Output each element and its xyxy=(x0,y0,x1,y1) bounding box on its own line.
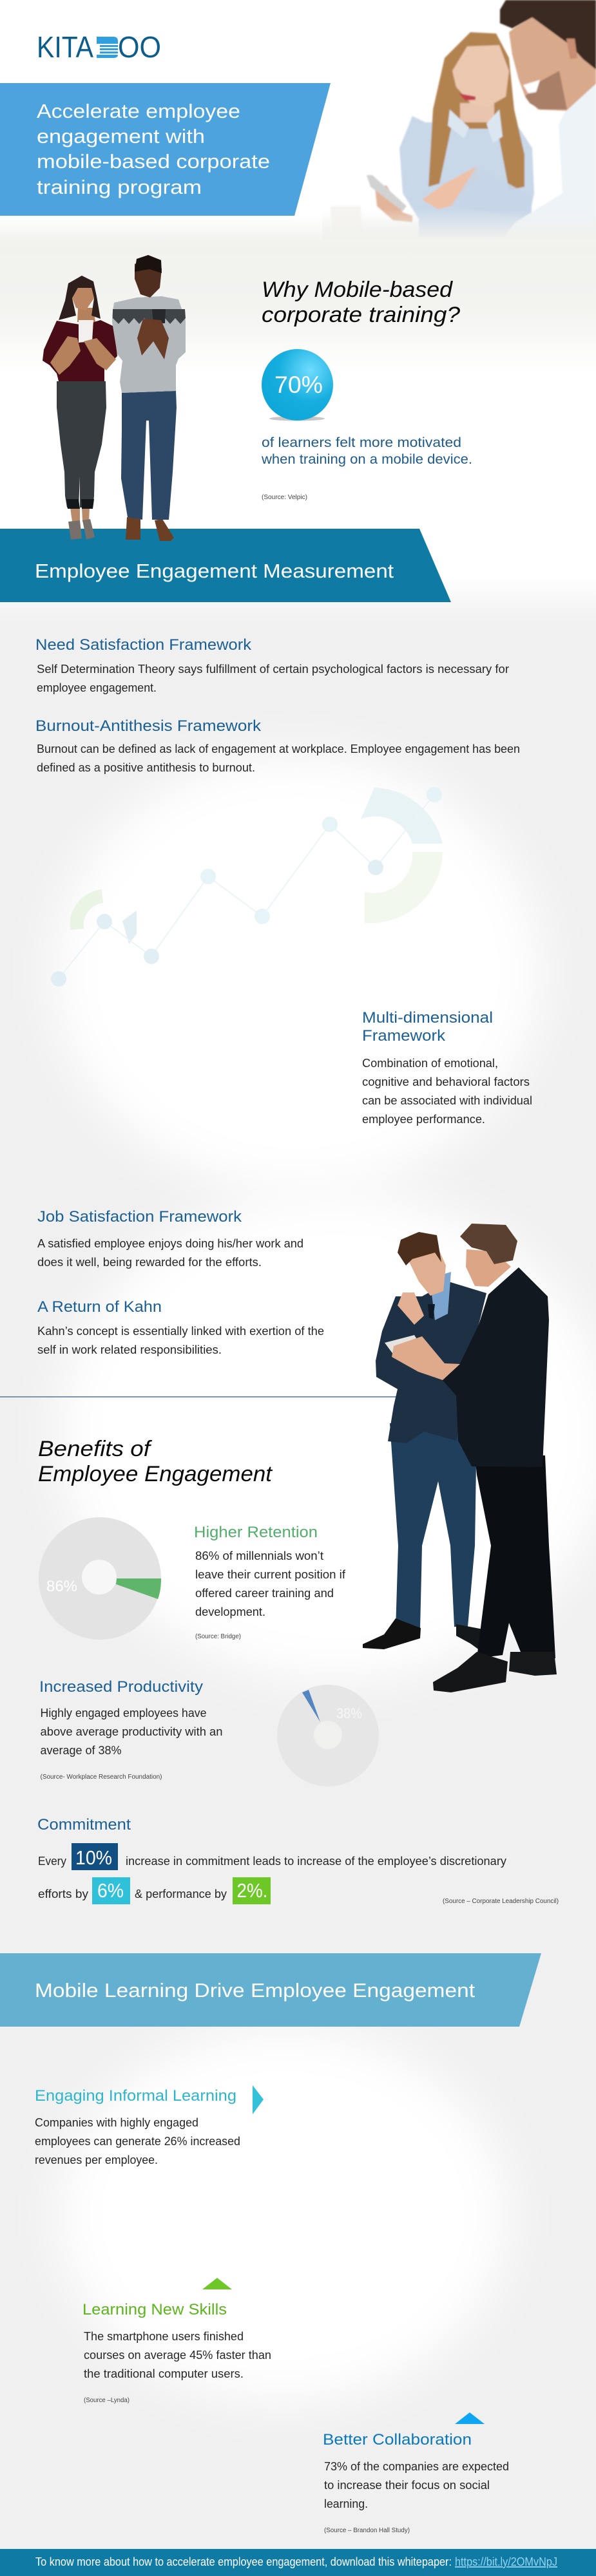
title banner: engagement with xyxy=(37,125,205,147)
70 percent caption: when training on a mobile device. xyxy=(261,452,472,467)
section banner: mobile learning: Mobile Learning Drive Employee Engagement xyxy=(35,1979,475,2002)
footer bar xyxy=(0,2549,596,2576)
70 percent ball: 70% xyxy=(274,372,323,398)
a return of kahn: A Return of Kahn xyxy=(37,1298,162,1316)
photo: two people with smartphones xyxy=(43,255,186,541)
increased productivity: above average productivity with an xyxy=(40,1725,223,1738)
increased productivity: Highly engaged employees have xyxy=(40,1707,206,1719)
logo: OO xyxy=(118,30,161,64)
commitment: & performance by xyxy=(135,1888,227,1900)
need satisfaction framework xyxy=(35,636,509,694)
stat box: 10 percent: 10% xyxy=(75,1846,112,1869)
why mobile heading: corporate training? xyxy=(262,303,460,327)
higher retention: leave their current position if xyxy=(195,1568,346,1581)
donut chart: 38 percent: 38% xyxy=(336,1705,362,1721)
multi-dimensional framework: Multi-dimensional xyxy=(362,1009,493,1027)
need satisfaction framework: employee engagement. xyxy=(37,681,157,694)
higher retention: 86% of millennials won’t xyxy=(195,1549,323,1562)
commitment: efforts by xyxy=(38,1888,88,1900)
fade under couple photo xyxy=(322,209,596,240)
man xyxy=(112,255,186,541)
job satisfaction framework: Job Satisfaction Framework xyxy=(37,1208,242,1226)
burnout antithesis framework xyxy=(35,717,520,774)
better collaboration: to increase their focus on social xyxy=(324,2479,490,2492)
70 percent ball xyxy=(262,349,333,421)
commitment xyxy=(37,1816,559,1905)
a return of kahn: Kahn’s concept is essentially linked with exertion of the xyxy=(37,1325,324,1338)
better collaboration: learning. xyxy=(324,2497,368,2510)
learning new skills: Learning New Skills xyxy=(82,2301,227,2318)
engaging informal learning xyxy=(35,2085,264,2166)
commitment: increase in commitment leads to increase of the employee’s discretionary xyxy=(126,1855,506,1868)
photo: couple with phone xyxy=(331,0,596,240)
donut chart: 86 percent: 86% xyxy=(46,1578,77,1595)
engaging informal learning: Companies with highly engaged xyxy=(35,2116,198,2129)
increased productivity xyxy=(39,1678,223,1781)
photo: two businessmen with tablet xyxy=(363,1224,557,1692)
burnout antithesis framework: defined as a positive antithesis to burnout. xyxy=(37,761,255,774)
commitment: Commitment xyxy=(37,1816,131,1833)
increased productivity: (Source- Workplace Research Foundation) xyxy=(40,1774,162,1781)
70 percent caption: (Source: Velpic) xyxy=(262,494,307,501)
title banner: mobile-based corporate xyxy=(37,150,270,173)
higher retention: (Source: Bridge) xyxy=(195,1633,241,1640)
higher retention: offered career training and xyxy=(195,1587,334,1600)
learning new skills: courses on average 45% faster than xyxy=(84,2349,271,2362)
section banner: mobile learning xyxy=(0,1953,541,2027)
job satisfaction framework xyxy=(37,1208,303,1269)
increased productivity: Increased Productivity xyxy=(39,1678,203,1696)
footer bar: To know more about how to accelerate employee engagement, download this whitepaper: xyxy=(35,2555,452,2568)
icon: blue triangle xyxy=(455,2412,485,2424)
learning new skills: The smartphone users finished xyxy=(84,2330,244,2343)
engaging informal learning: revenues per employee. xyxy=(35,2154,158,2166)
higher retention: development. xyxy=(195,1605,265,1618)
better collaboration: (Source – Brandon Hall Study) xyxy=(324,2527,410,2534)
left businessman xyxy=(363,1232,486,1652)
logo: KITA xyxy=(37,30,93,64)
learning new skills: (Source –Lynda) xyxy=(84,2397,130,2404)
stat box: 6 percent xyxy=(92,1877,130,1904)
woman xyxy=(43,276,117,540)
better collaboration xyxy=(323,2412,509,2534)
stat box: 2 percent: 2%. xyxy=(237,1879,268,1902)
higher retention xyxy=(194,1524,346,1640)
logo xyxy=(37,30,161,64)
icon: green triangle xyxy=(202,2278,232,2289)
multi-dimensional framework: can be associated with individual xyxy=(362,1094,532,1107)
benefits heading xyxy=(38,1437,273,1486)
multi-dimensional framework: cognitive and behavioral factors xyxy=(362,1075,530,1088)
why mobile heading xyxy=(262,278,460,327)
title banner: Accelerate employee xyxy=(37,100,240,122)
70 percent caption xyxy=(261,435,472,501)
decorative network graph xyxy=(51,787,443,987)
need satisfaction framework: Self Determination Theory says fulfillment of certain psychological factors is necessary for xyxy=(37,663,509,676)
donut chart: 86 percent xyxy=(39,1517,161,1640)
icon: cyan arrow xyxy=(253,2085,264,2114)
better collaboration: Better Collaboration xyxy=(323,2431,472,2448)
burnout antithesis framework: Burnout can be defined as lack of engagement at workplace. Employee engagement has been xyxy=(37,743,520,755)
job satisfaction framework: A satisfied employee enjoys doing his/her work and xyxy=(37,1237,303,1250)
job satisfaction framework: does it well, being rewarded for the efforts. xyxy=(37,1256,262,1269)
footer bar: https://bit.ly/2OMvNpJ xyxy=(455,2555,557,2568)
commitment: (Source – Corporate Leadership Council) xyxy=(443,1898,559,1905)
multi-dimensional framework: Framework xyxy=(362,1027,446,1045)
title banner xyxy=(0,83,331,216)
multi-dimensional framework xyxy=(362,1009,532,1126)
multi-dimensional framework: employee performance. xyxy=(362,1113,485,1126)
a return of kahn: self in work related responsibilities. xyxy=(37,1343,222,1356)
stat box: 6 percent: 6% xyxy=(97,1879,124,1902)
need satisfaction framework: Need Satisfaction Framework xyxy=(35,636,252,654)
better collaboration: 73% of the companies are expected xyxy=(324,2460,509,2473)
engaging informal learning: Engaging Informal Learning xyxy=(35,2087,236,2105)
a return of kahn xyxy=(37,1298,324,1356)
multi-dimensional framework: Combination of emotional, xyxy=(362,1057,498,1070)
benefits heading: Employee Engagement xyxy=(38,1462,273,1486)
why mobile heading: Why Mobile-based xyxy=(262,278,453,302)
section banner: measurement: Employee Engagement Measurement xyxy=(35,560,394,582)
icon: book letter B xyxy=(97,37,118,58)
section banner: measurement xyxy=(0,529,451,602)
higher retention: Higher Retention xyxy=(194,1524,318,1541)
burnout antithesis framework: Burnout-Antithesis Framework xyxy=(35,717,262,735)
learning new skills: the traditional computer users. xyxy=(84,2367,244,2380)
learning new skills xyxy=(82,2278,271,2404)
engaging informal learning: employees can generate 26% increased xyxy=(35,2135,240,2148)
donut chart: 38 percent xyxy=(277,1685,379,1786)
tablet and hand xyxy=(385,1335,460,1380)
benefits heading: Benefits of xyxy=(38,1437,153,1461)
70 percent caption: of learners felt more motivated xyxy=(262,435,461,450)
commitment: Every xyxy=(38,1855,66,1868)
title banner: training program xyxy=(37,176,202,198)
increased productivity: average of 38% xyxy=(40,1744,121,1757)
right businessman xyxy=(433,1224,557,1692)
